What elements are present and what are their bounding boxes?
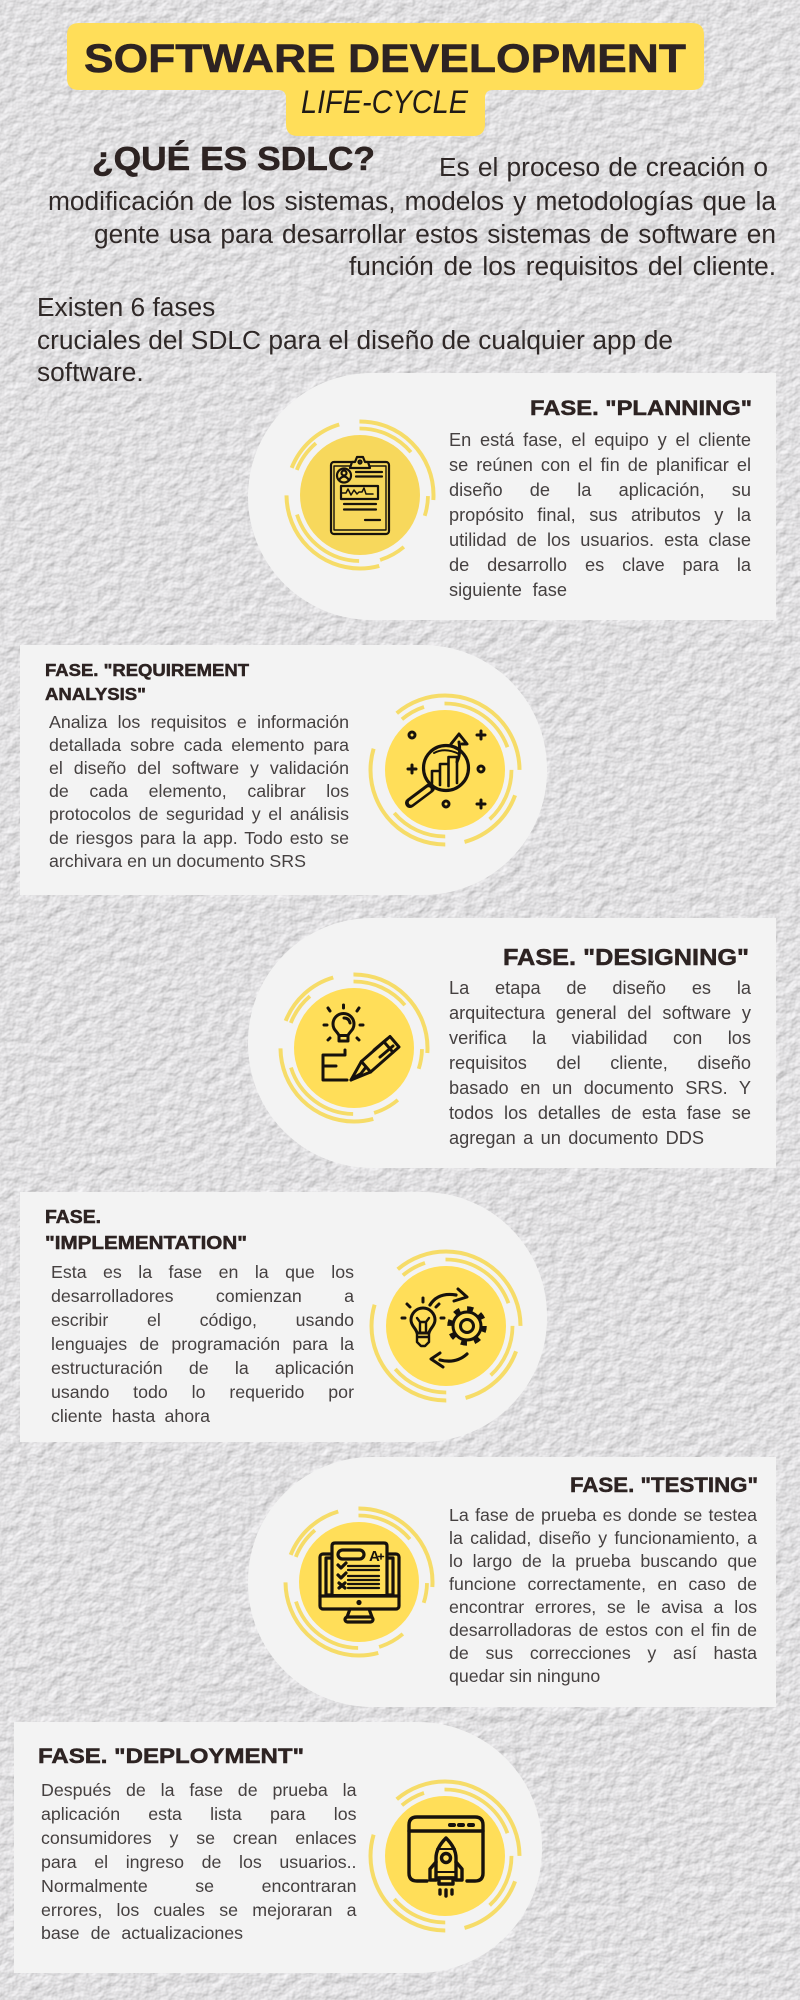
text: testing: quedar sin ninguno xyxy=(449,1666,600,1686)
text: planning xyxy=(449,430,751,600)
text: deployment: Normalmente se encontraran xyxy=(41,1876,356,1896)
text: designing: todos los detalles de esta fase se xyxy=(449,1103,751,1123)
intro paragraph xyxy=(48,152,776,281)
text: testing xyxy=(449,1505,757,1686)
text: requirement analysis: archivara en un documento SRS xyxy=(49,851,306,871)
main title: SOFTWARE DEVELOPMENT xyxy=(84,37,686,81)
text: implementation: cliente hasta ahora xyxy=(51,1406,210,1426)
text: implementation: Esta es la fase en la que los xyxy=(51,1262,354,1282)
text: requirement analysis xyxy=(49,712,349,871)
text: deployment: para el ingreso de los usuarios.. xyxy=(41,1852,356,1872)
text: testing: de sus correcciones y así hasta xyxy=(449,1643,757,1663)
heading: implementation: "IMPLEMENTATION" xyxy=(45,1233,247,1253)
text: planning: propósito final, sus atributos y la xyxy=(449,505,751,525)
intro: six phases: cruciales del SDLC para el diseño de cualquier app de xyxy=(37,325,673,355)
text: implementation: desarrolladores comienzan a xyxy=(51,1286,354,1306)
text: designing: agregan a un documento DDS xyxy=(449,1128,704,1148)
text: requirement analysis: detallada sobre cada elemento para xyxy=(49,735,349,755)
text: designing: requisitos del cliente, diseño xyxy=(449,1053,751,1073)
text: testing: funcione correctamente, en caso de xyxy=(449,1574,757,1594)
icon: bulb, gear and cycle arrows xyxy=(370,1250,522,1402)
text: designing: verifica la viabilidad con los xyxy=(449,1028,751,1048)
icon: rocket in browser window xyxy=(368,1780,522,1932)
panel: planning xyxy=(248,373,776,620)
intro: six phases xyxy=(37,292,673,387)
text: deployment: base de actualizaciones xyxy=(41,1923,243,1943)
text: requirement analysis: el diseño del software y validación xyxy=(49,758,349,778)
subtitle: life-cycle: LIFE-CYCLE xyxy=(301,84,469,120)
text: designing: arquitectura general del software y xyxy=(449,1003,751,1023)
intro paragraph: gente usa para desarrollar estos sistemas de software en xyxy=(94,219,776,249)
text: implementation: escribir el código, usando xyxy=(51,1310,354,1330)
text: planning: se reúnen con el fin de planificar el xyxy=(449,455,751,475)
heading: what is SDLC: ¿QUÉ ES SDLC? xyxy=(92,140,375,177)
text: testing: lo largo de la prueba buscando que xyxy=(449,1551,757,1571)
heading: implementation xyxy=(45,1207,247,1253)
text: designing: La etapa de diseño es la xyxy=(449,978,751,998)
icon: light bulb and pencil xyxy=(278,972,430,1124)
icon: monitor with test sheet xyxy=(284,1506,434,1658)
heading: planning: FASE. "PLANNING" xyxy=(530,397,752,420)
panel: designing xyxy=(248,918,776,1168)
intro paragraph: función de los requisitos del cliente. xyxy=(349,251,776,281)
text: implementation: usando todo lo requerido por xyxy=(51,1382,354,1402)
panel: implementation xyxy=(20,1192,547,1442)
heading: requirement analysis: FASE. "REQUIREMENT xyxy=(45,660,249,680)
text: deployment xyxy=(41,1780,356,1943)
heading: testing: FASE. "TESTING" xyxy=(570,1474,758,1497)
text: planning: utilidad de los usuarios. esta clase xyxy=(449,530,751,550)
text: planning: diseño de la aplicación, su xyxy=(449,480,751,500)
banner yellow background xyxy=(67,23,704,136)
text: planning: de desarrollo es clave para la xyxy=(449,555,751,575)
text: testing: La fase de prueba es donde se testea xyxy=(449,1505,757,1525)
text: implementation xyxy=(51,1262,354,1426)
heading: requirement analysis xyxy=(45,660,250,704)
icon: clipboard xyxy=(284,420,436,570)
panel: testing xyxy=(248,1457,776,1707)
intro paragraph: modificación de los sistemas, modelos y metodologías que la xyxy=(48,186,776,216)
text: requirement analysis: protocolos de seguridad y el análisis xyxy=(49,804,349,824)
intro: six phases: Existen 6 fases xyxy=(37,292,215,322)
heading: requirement analysis: ANALYSIS" xyxy=(45,684,146,704)
text: testing: encontrar errores, se le avisa a los xyxy=(449,1597,757,1617)
heading: deployment: FASE. "DEPLOYMENT" xyxy=(38,1745,304,1768)
text: deployment: aplicación esta lista para los xyxy=(41,1804,356,1824)
text: requirement analysis: de cada elemento, calibrar los xyxy=(49,781,349,801)
text: deployment: consumidores y se crean enlaces xyxy=(41,1828,356,1848)
text: deployment: errores, los cuales se mejoraran a xyxy=(41,1900,356,1920)
icon: monitor with test sheet: A xyxy=(369,1548,380,1565)
panel: requirement analysis xyxy=(20,645,547,895)
text: designing xyxy=(449,978,751,1148)
text: implementation: estructuración de la aplicación xyxy=(51,1358,354,1378)
intro: six phases: software. xyxy=(37,357,144,387)
text: implementation: lenguajes de programación para la xyxy=(51,1334,354,1354)
text: testing: la calidad, diseño y funcionamiento, a xyxy=(449,1528,757,1548)
panel: deployment xyxy=(14,1722,542,1973)
text: planning: En está fase, el equipo y el cliente xyxy=(449,430,751,450)
title banner xyxy=(67,23,704,136)
icon: magnifier with chart xyxy=(368,694,522,846)
text: deployment: Después de la fase de prueba la xyxy=(41,1780,356,1800)
text: planning: siguiente fase xyxy=(449,580,567,600)
text: designing: basado en un documento SRS. Y xyxy=(449,1078,751,1098)
text: requirement analysis: Analiza los requisitos e información xyxy=(49,712,349,732)
heading: designing: FASE. "DESIGNING" xyxy=(503,944,749,970)
heading: implementation: FASE. xyxy=(45,1207,101,1227)
text: requirement analysis: de riesgos para la app. Todo esto se xyxy=(49,828,349,848)
intro paragraph: Es el proceso de creación o xyxy=(439,152,768,182)
text: testing: desarrolladoras de estos con el fin de xyxy=(449,1620,757,1640)
